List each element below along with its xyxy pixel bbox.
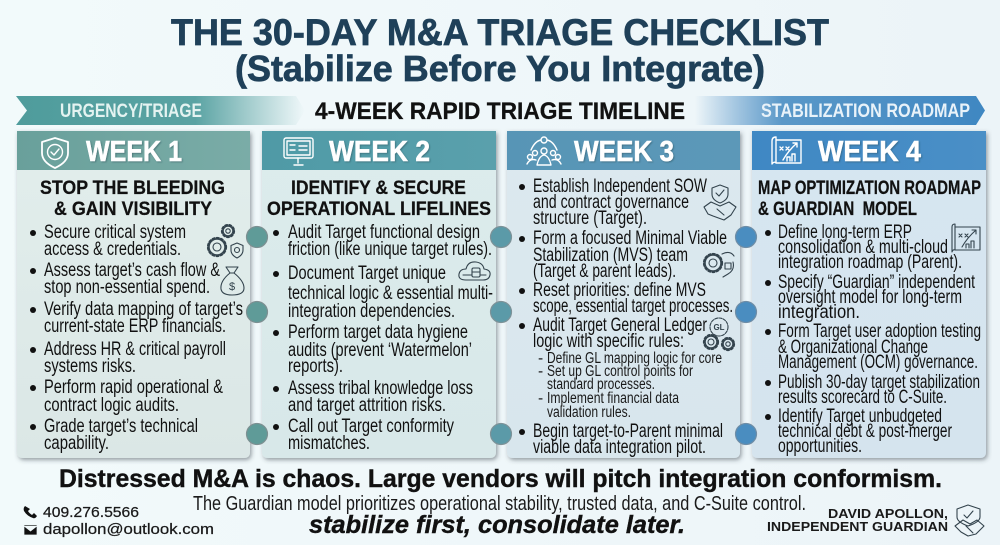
week 3 checklist: logic with specific rules: — [533, 331, 684, 352]
week 2 checklist: reports). — [288, 356, 343, 377]
week 1 checklist: Address HR & critical payroll — [44, 339, 226, 360]
week 4 header — [752, 131, 986, 170]
icon: roadmap chart — [952, 224, 980, 252]
icon: guardian handshake — [955, 505, 984, 536]
contact details: dapollon@outlook.com — [43, 521, 214, 538]
week 4 checklist: opportunities. — [778, 436, 862, 457]
icon: gears and shield — [208, 225, 243, 258]
title: THE 30-DAY M&A TRIAGE CHECKLIST — [171, 12, 829, 53]
icon: cloud database — [459, 262, 490, 280]
contact details — [24, 504, 214, 538]
week 3 checklist: Audit Target General Ledger — [533, 315, 707, 336]
week 3 checklist: Begin target-to-Parent minimal — [533, 421, 723, 442]
week 2 checklist: Audit Target functional design — [288, 222, 480, 243]
week 1 checklist: systems risks. — [44, 356, 136, 377]
contact details: 409.276.5566 — [43, 504, 139, 521]
week 2 heading — [267, 177, 491, 220]
week 3 header: WEEK 3 — [574, 136, 674, 168]
timeline heading: 4-WEEK RAPID TRIAGE TIMELINE — [315, 98, 685, 125]
connector dots: weeks 3 to 4 — [736, 226, 756, 444]
week 1 checklist: access & credentials. — [44, 239, 181, 260]
week 2 checklist: mismatches. — [288, 433, 370, 454]
week 1 checklist — [30, 222, 243, 454]
icon: team gears — [704, 252, 734, 277]
week 1 checklist: Verify data mapping of target’s — [44, 299, 243, 320]
author name: DAVID APOLLON, — [828, 506, 948, 521]
icon: money bag — [221, 267, 244, 295]
week 4 heading — [758, 177, 981, 220]
week 3 checklist: standard processes. — [547, 376, 655, 393]
icon: money bag: $ — [229, 281, 235, 293]
week 3 checklist: - — [538, 390, 543, 407]
week 3 checklist: - — [538, 350, 543, 367]
week 2 heading: IDENTIFY & SECURE — [291, 177, 466, 199]
week 2 checklist: integration dependencies. — [288, 301, 455, 322]
week 3 checklist: viable data integration pilot. — [533, 437, 706, 458]
panel: week 2 — [262, 131, 496, 458]
week 3 checklist: Stabilization (MVS) team — [533, 245, 688, 266]
week 3 checklist: - — [538, 363, 543, 380]
icon: team — [527, 137, 561, 165]
week 3 checklist: Establish Independent SOW — [533, 176, 707, 197]
week 2 checklist: audits (prevent ‘Watermelon’ — [288, 340, 472, 361]
week 3 checklist: validation rules. — [547, 404, 631, 421]
week 1 heading — [40, 177, 225, 220]
week 3 checklist: Define GL mapping logic for core — [547, 350, 722, 367]
week 2 header — [262, 131, 496, 170]
week 2 checklist: and target attrition risks. — [288, 395, 446, 416]
week 1 heading: STOP THE BLEEDING — [40, 177, 225, 199]
footer headline: Distressed M&A is chaos. Large vendors will pitch integration conformism. — [59, 465, 942, 493]
author name — [767, 506, 948, 534]
ribbon: urgency/triage — [16, 96, 305, 125]
week 2 header: WEEK 2 — [329, 136, 430, 168]
week 2 checklist: Document Target unique — [288, 263, 446, 284]
week 3 checklist: structure (Target). — [533, 208, 647, 229]
icon: monitor — [284, 138, 313, 165]
week 3 header — [507, 131, 740, 170]
week 2 checklist: Perform target data hygiene — [288, 322, 468, 343]
week 4 checklist: Define long-term ERP — [778, 222, 912, 243]
panel: week 3 — [507, 131, 740, 458]
week 2 checklist: friction (like unique target rules). — [288, 239, 492, 260]
week 3 checklist: Reset priorities: define MVS — [533, 280, 706, 301]
connector dots: weeks 2 to 3 — [490, 226, 512, 444]
icon: shield — [42, 138, 68, 168]
week 1 checklist: Assess target’s cash flow & — [44, 260, 220, 281]
week 4 header: WEEK 4 — [818, 136, 921, 168]
week 4 checklist: & Organizational Change — [778, 337, 928, 358]
week 3 checklist: and contract governance — [533, 192, 689, 213]
week 2 checklist: technical logic & essential multi- — [288, 283, 493, 304]
title — [171, 12, 829, 89]
week 2 checklist: Assess tribal knowledge loss — [288, 378, 473, 399]
week 3 checklist: Implement financial data — [547, 390, 679, 407]
title: (Stabilize Before You Integrate) — [235, 48, 765, 89]
connector dots: weeks 1 to 2 — [246, 226, 268, 444]
week 4 checklist — [765, 222, 981, 457]
icon: phone — [24, 506, 37, 518]
week 4 checklist: Identify Target unbudgeted — [778, 406, 942, 427]
icon: strategy map — [772, 137, 801, 164]
ribbon: urgency/triage: URGENCY/TRIAGE — [60, 101, 202, 122]
icon: GL gears: GL — [713, 323, 725, 332]
week 3 checklist — [519, 176, 733, 458]
week 3 checklist: Form a focused Minimal Viable — [533, 228, 727, 249]
week 3 checklist: (Target & parent leads). — [533, 261, 676, 282]
week 1 header — [17, 131, 250, 170]
week 2 checklist — [273, 222, 493, 454]
panel: week 1 — [17, 131, 250, 458]
week 3 checklist: Set up GL control points for — [547, 363, 693, 380]
icon: GL gears — [704, 318, 734, 350]
week 1 checklist: contract logic audits. — [44, 395, 179, 416]
week 4 heading: & GUARDIAN MODEL — [758, 198, 917, 220]
author name: INDEPENDENT GUARDIAN — [767, 519, 948, 534]
week 1 checklist: Grade target’s technical — [44, 416, 198, 437]
panel: week 4 — [752, 131, 986, 458]
week 3 checklist: scope, essential target processes. — [533, 296, 733, 317]
week 1 checklist: Perform rapid operational & — [44, 377, 223, 398]
ribbon: stabilization roadmap: STABILIZATION ROADMAP — [761, 101, 970, 122]
week 1 heading: & GAIN VISIBILITY — [54, 198, 212, 220]
week 1 header: WEEK 1 — [86, 136, 182, 168]
week 1 checklist: stop non-essential spend. — [44, 277, 210, 298]
icon: shield handshake — [704, 185, 736, 220]
week 1 checklist: current-state ERP financials. — [44, 316, 226, 337]
week 1 checklist: Secure critical system — [44, 222, 186, 243]
footer subline: The Guardian model prioritizes operational stability, trusted data, and C-Suite control. — [193, 493, 806, 515]
ribbon: stabilization roadmap — [695, 96, 985, 125]
footer tagline: stabilize first, consolidate later. — [309, 511, 685, 539]
week 2 checklist: Call out Target conformity — [288, 416, 454, 437]
week 4 checklist: consolidation & multi-cloud — [778, 237, 948, 258]
week 2 heading: OPERATIONAL LIFELINES — [267, 198, 491, 220]
icon: envelope — [24, 525, 37, 535]
week 4 checklist: integration. — [778, 302, 860, 323]
week 1 checklist: capability. — [44, 433, 109, 454]
